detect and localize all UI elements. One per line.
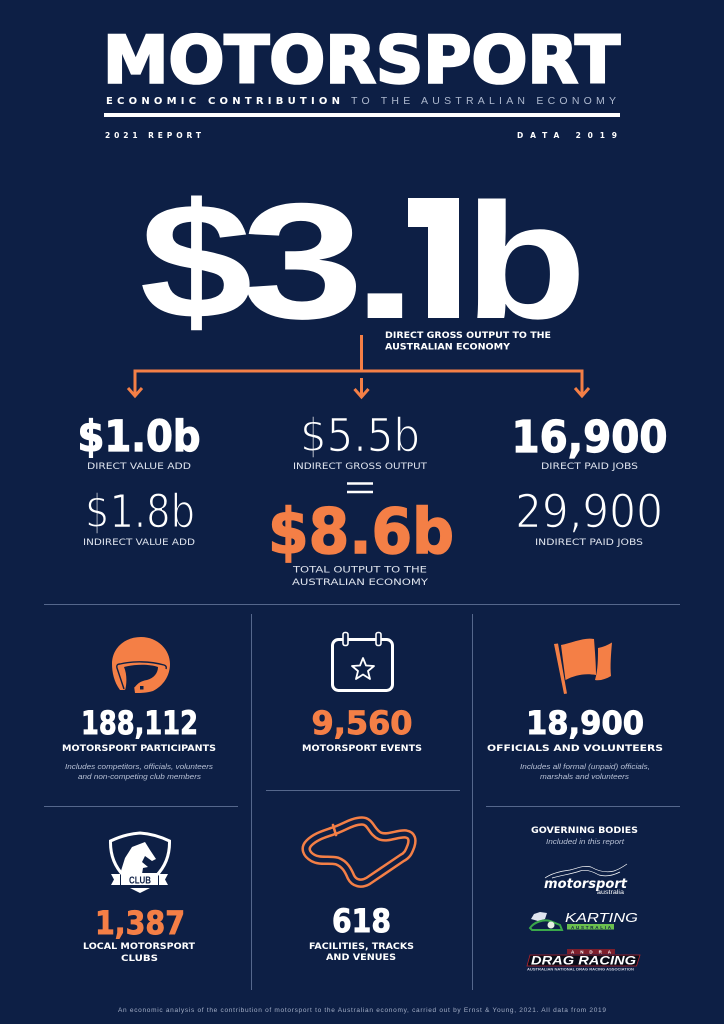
indirect paid jobs: 29,900 (515, 484, 663, 538)
panel: governing bodies (527, 826, 640, 972)
label: MOTORSPORT EVENTS (302, 744, 422, 754)
panel: output: AUSTRALIAN ECONOMY (292, 578, 429, 588)
icon: calendar with star (332, 632, 392, 690)
figure: 618 (332, 902, 391, 940)
header rule (104, 113, 620, 117)
logo: ANDRA Drag Racing: AUSTRALIAN NATIONAL DRAG RACING ASSOCIATION (527, 968, 635, 972)
footer note: An economic analysis of the contribution of motorsport to the Australian economy, carried out by Ernst & Young, 2021. All data from 2019 (118, 1007, 606, 1014)
headline figure: . (351, 169, 419, 353)
headline figure (142, 196, 579, 330)
logo: ANDRA Drag Racing (527, 949, 640, 972)
note: Includes competitors, officials, volunteers (65, 762, 213, 771)
equals sign (347, 484, 373, 492)
panel: value add: INDIRECT VALUE ADD (83, 538, 195, 548)
headline caption: AUSTRALIAN ECONOMY (385, 342, 511, 352)
label: OFFICIALS AND VOLUNTEERS (487, 744, 663, 754)
direct value add: $1.0b (78, 413, 200, 462)
logo: Motorsport Australia: australia (597, 890, 625, 896)
subtitle (106, 95, 616, 107)
label: AND VENUES (326, 953, 396, 963)
logo: Karting Australia: AUSTRALIA (571, 925, 612, 930)
note: marshals and volunteers (540, 772, 629, 781)
note: and non-competing club members (78, 772, 201, 781)
headline figure: 3 (241, 169, 364, 353)
headline caption (385, 331, 551, 352)
label: CLUBS (121, 954, 158, 964)
headline figure: 1 (382, 169, 474, 353)
indirect value add: $1.8b (85, 484, 195, 538)
figure: 188,112 (81, 704, 198, 742)
indirect gross output: $5.5b (300, 408, 420, 462)
icon: flag (554, 639, 612, 694)
figure: 1,387 (95, 904, 185, 942)
total output: $8.6b (268, 495, 454, 568)
panel: facilities (306, 821, 414, 963)
label (309, 942, 414, 963)
direct paid jobs: 16,900 (512, 412, 668, 463)
figure: 18,900 (526, 704, 644, 742)
panel: officials (487, 639, 663, 781)
label: FACILITIES, TRACKS (309, 942, 414, 952)
headline figure: $ (140, 169, 252, 353)
logo: Karting Australia: KARTING (565, 910, 638, 925)
logo: Motorsport Australia: motorsport (544, 877, 628, 892)
panel: output: TOTAL OUTPUT TO THE (292, 566, 427, 576)
report year: 2021 REPORT (105, 131, 202, 140)
heading: GOVERNING BODIES (531, 826, 638, 836)
label: MOTORSPORT PARTICIPANTS (62, 744, 216, 754)
logo: Motorsport Australia (544, 864, 628, 896)
panel: output (268, 408, 454, 588)
note: Included in this report (546, 837, 625, 846)
panel: output: INDIRECT GROSS OUTPUT (293, 462, 428, 472)
subtitle: ECONOMIC CONTRIBUTION (106, 96, 340, 107)
panel: jobs: DIRECT PAID JOBS (541, 462, 638, 472)
panel: events (302, 632, 422, 754)
panel: participants (62, 637, 216, 781)
logo: ANDRA Drag Racing: DRAG RACING (531, 954, 636, 968)
logo: Karting Australia (530, 910, 638, 930)
icon: club badge: CLUB (129, 876, 151, 886)
panel: clubs (83, 833, 196, 964)
headline caption: DIRECT GROSS OUTPUT TO THE (385, 331, 551, 341)
label: LOCAL MOTORSPORT (83, 942, 196, 952)
icon: race track (306, 821, 412, 883)
note (65, 762, 213, 781)
header (103, 24, 620, 140)
panel: value add: DIRECT VALUE ADD (87, 462, 191, 472)
subtitle: TO THE AUSTRALIAN ECONOMY (351, 95, 616, 107)
figure: 9,560 (312, 704, 412, 742)
panel: value add (78, 413, 200, 548)
arrows: connector tree (128, 335, 589, 397)
title: MOTORSPORT (103, 24, 620, 98)
label (83, 942, 196, 964)
panel: jobs (512, 412, 668, 548)
note: Includes all formal (unpaid) officials, (520, 762, 650, 771)
data year: DATA 2019 (517, 131, 617, 140)
panel: jobs: INDIRECT PAID JOBS (535, 538, 643, 548)
headline figure: b (464, 169, 587, 353)
note (520, 762, 650, 781)
logo: ANDRA Drag Racing: ANDRA (571, 950, 612, 954)
icon: helmet (112, 637, 170, 693)
